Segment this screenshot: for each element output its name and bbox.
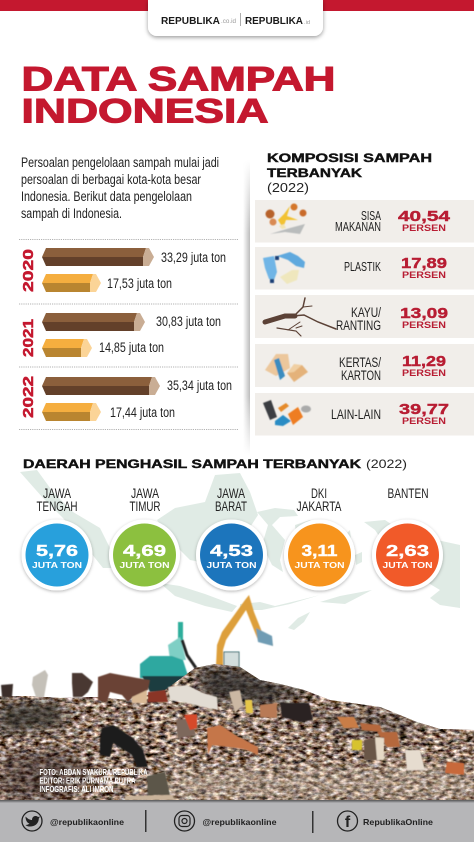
region: Jawa Timur xyxy=(109,486,180,590)
waste mound xyxy=(0,660,474,800)
photo: landfill with excavators and cows xyxy=(0,595,474,800)
composition list xyxy=(255,200,474,436)
region: Jawa Barat: BARAT xyxy=(215,499,247,514)
footer bar xyxy=(0,800,474,842)
composition heading xyxy=(267,153,432,195)
group: 2020: 2020 xyxy=(21,249,37,292)
row: lain-lain: 39,77 xyxy=(399,402,449,418)
group: 2021: 2021 xyxy=(21,319,37,357)
row: plastik: 17,89 xyxy=(401,256,447,272)
section heading: top regions: DAERAH PENGHASIL SAMPAH TERBANYAK xyxy=(23,459,362,471)
photo credits: INFOGRAFIS: ALI IMRON xyxy=(40,784,114,794)
group: 2020: 33,29 juta ton xyxy=(161,250,226,265)
row: kayu/ranting xyxy=(255,295,474,338)
row: sisa makanan: MAKANAN xyxy=(335,220,381,234)
group: 2021: 14,85 juta ton xyxy=(99,340,164,355)
region: DKI Jakarta: DKI xyxy=(311,486,327,501)
top red bar xyxy=(0,0,474,11)
section heading: top regions xyxy=(23,457,407,471)
region: Banten: JUTA TON xyxy=(382,560,432,570)
handle: twitter: @republikaonline xyxy=(50,817,124,827)
composition heading: KOMPOSISI SAMPAH xyxy=(267,153,432,165)
region: Jawa Barat: JUTA TON xyxy=(206,560,256,570)
region: Jawa Barat: 4,53 xyxy=(210,543,254,560)
composition heading: (2022) xyxy=(267,181,309,195)
region: DKI Jakarta: JAKARTA xyxy=(296,499,342,514)
title xyxy=(22,60,336,130)
row: lain-lain: LAIN-LAIN xyxy=(331,407,381,422)
row: kertas/karton xyxy=(255,344,474,387)
row: sisa makanan xyxy=(255,200,474,242)
row: sisa makanan: SISA xyxy=(361,209,381,223)
region: Jawa Tengah xyxy=(22,486,92,590)
row: lain-lain: PERSEN xyxy=(402,416,446,426)
row: kertas/karton: KARTON xyxy=(341,368,381,383)
row: kertas/karton: PERSEN xyxy=(402,368,446,378)
group: 2022 xyxy=(21,376,232,421)
group: 2022: 17,44 juta ton xyxy=(110,405,175,420)
photo credits: EDITOR: ERIK PURNAMA PUTRA xyxy=(40,776,136,786)
logo tab: REPUBLIKA xyxy=(245,15,303,27)
region: DKI Jakarta: JUTA TON xyxy=(294,560,344,570)
row: plastik: PERSEN xyxy=(402,270,446,280)
region: Banten xyxy=(372,486,443,590)
composition heading: TERBANYAK xyxy=(267,168,363,180)
bar chart: yearly waste xyxy=(19,240,238,430)
logo tab xyxy=(148,0,323,36)
region: Banten: 2,63 xyxy=(386,543,430,560)
intro text: sampah di Indonesia. xyxy=(21,206,122,221)
region: DKI Jakarta: 3,11 xyxy=(302,543,338,560)
title: DATA SAMPAH xyxy=(22,60,336,98)
intro text: Indonesia. Berikut data pengelolaan xyxy=(21,189,192,204)
region: Jawa Timur: JUTA TON xyxy=(120,560,170,570)
title: INDONESIA xyxy=(22,92,268,130)
icon: instagram xyxy=(174,811,194,831)
region: Jawa Timur: JAWA xyxy=(131,486,159,501)
column divider shadow xyxy=(243,160,250,455)
intro text xyxy=(21,155,219,221)
region: DKI Jakarta xyxy=(284,486,355,590)
handle: instagram: @republikaonline xyxy=(202,817,277,827)
region: Jawa Timur: 4,69 xyxy=(123,543,167,560)
region: Jawa Tengah: JAWA xyxy=(43,486,71,501)
region: Banten: BANTEN xyxy=(388,486,428,501)
row: lain-lain xyxy=(255,393,474,436)
logo tab: .co.id xyxy=(221,19,236,25)
background map of Indonesia xyxy=(20,470,460,630)
region: Jawa Barat xyxy=(196,486,267,590)
row: kayu/ranting: KAYU/ xyxy=(351,305,381,320)
row: kertas/karton: KERTAS/ xyxy=(339,355,381,370)
group: 2021 xyxy=(21,313,221,357)
region: Jawa Timur: TIMUR xyxy=(130,499,161,514)
group: 2020: 17,53 juta ton xyxy=(107,276,172,291)
row: kayu/ranting: RANTING xyxy=(336,318,381,333)
photo credits: FOTO: ABDAN SYAKURA/REPUBLIKA xyxy=(40,767,148,777)
handle: facebook: RepublikaOnline xyxy=(363,817,433,827)
row: kayu/ranting: PERSEN xyxy=(402,320,446,330)
group: 2021: 30,83 juta ton xyxy=(156,314,221,329)
row: plastik: PLASTIK xyxy=(344,259,381,274)
cows xyxy=(1,670,464,800)
group: 2022: 35,34 juta ton xyxy=(167,378,232,393)
group: 2020 xyxy=(21,248,226,292)
row: plastik xyxy=(255,247,474,290)
region: Jawa Tengah: 5,76 xyxy=(36,543,79,560)
icon: facebook xyxy=(338,811,358,831)
region: Jawa Tengah: JUTA TON xyxy=(32,560,82,570)
region: Jawa Barat: JAWA xyxy=(217,486,245,501)
row: kayu/ranting: 13,09 xyxy=(400,306,448,322)
intro text: Persoalan pengelolaan sampah mulai jadi xyxy=(21,155,219,170)
logo tab: REPUBLIKA xyxy=(161,15,220,27)
icon: twitter xyxy=(22,811,42,831)
row: kertas/karton: 11,29 xyxy=(402,354,446,370)
section heading: top regions: (2022) xyxy=(366,457,407,471)
intro text: persoalan di berbagai kota-kota besar xyxy=(21,172,201,187)
photo credits xyxy=(40,767,148,794)
excavator: orange xyxy=(216,595,273,667)
region: Jawa Tengah: TENGAH xyxy=(36,499,78,514)
group: 2022: 2022 xyxy=(21,376,37,418)
excavator: teal xyxy=(140,622,196,692)
icon: facebook: f xyxy=(345,814,351,831)
row: sisa makanan: 40,54 xyxy=(398,209,450,225)
logo tab: .id xyxy=(304,20,310,26)
row: sisa makanan: PERSEN xyxy=(402,223,446,233)
